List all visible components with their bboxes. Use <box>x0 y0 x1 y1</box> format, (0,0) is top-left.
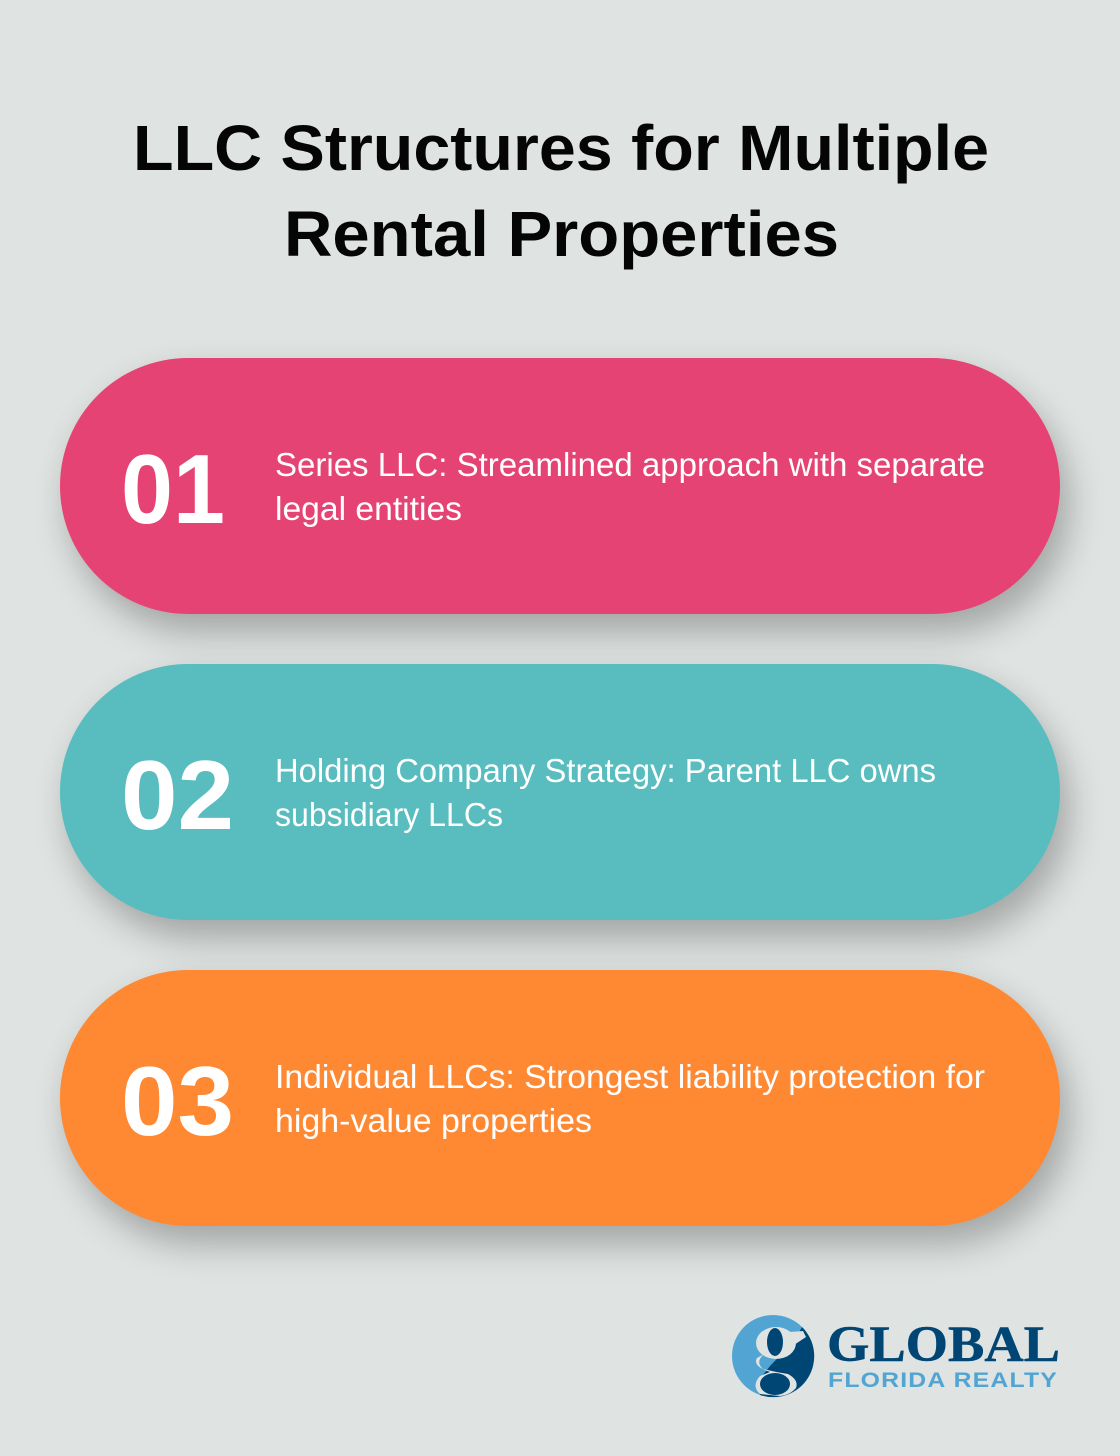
text: Holding Company Strategy: Holding Company Strategy: Parent LLC owns <box>275 752 936 789</box>
text: Individual LLCs: high-value properties <box>275 1102 592 1139</box>
panel: step 2 pill <box>60 664 1060 920</box>
icon: g circle <box>732 1315 814 1397</box>
title: LLC Structures for Multiple <box>133 112 989 184</box>
logo: Global Florida Realty <box>732 1315 1060 1397</box>
text: Individual LLCs <box>275 1058 985 1139</box>
title: Rental Properties <box>284 198 839 270</box>
panel: step 1 pill <box>60 358 1060 614</box>
number 03: 03 <box>121 1046 234 1156</box>
text: FLORIDA REALTY: FLORIDA REALTY <box>828 1369 1058 1392</box>
text: GLOBAL: GLOBAL <box>827 1317 1060 1373</box>
text: Individual LLCs: Individual LLCs: Strongest liability protection for <box>275 1058 985 1095</box>
number 01: 01 <box>121 434 225 544</box>
title <box>133 112 989 270</box>
text: Holding Company Strategy <box>275 752 936 833</box>
panel: step 3 pill <box>60 970 1060 1226</box>
number 02: 02 <box>121 740 234 850</box>
text: Holding Company Strategy: subsidiary LLCs <box>275 796 503 833</box>
text: Series LLC: Series LLC: Streamlined approach with separate <box>275 446 985 483</box>
text: Series LLC <box>275 446 985 527</box>
text: Series LLC: legal entities <box>275 490 462 527</box>
